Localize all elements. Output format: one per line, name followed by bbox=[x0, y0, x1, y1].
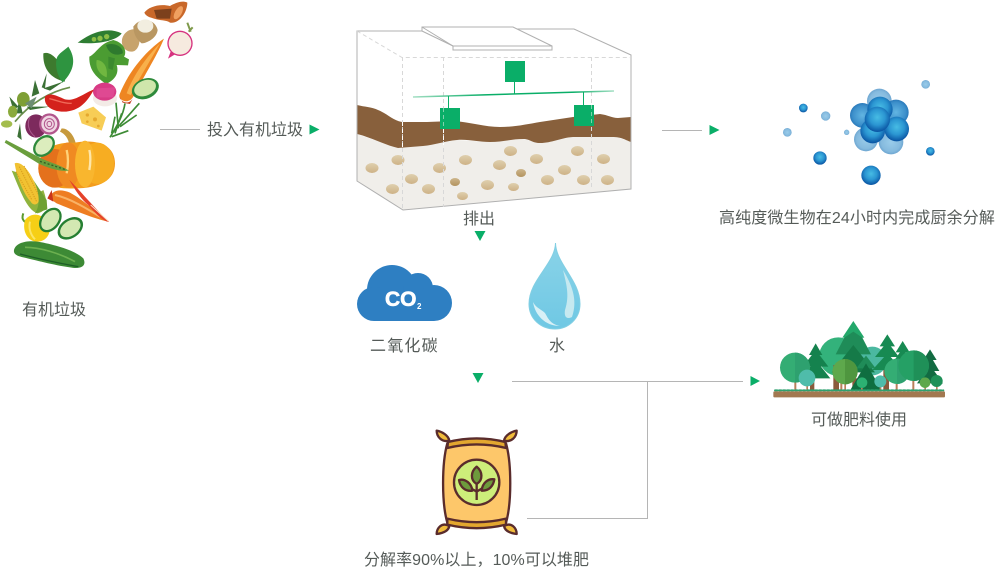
pea pod bbox=[78, 30, 122, 43]
cucumber slices low bbox=[34, 203, 87, 244]
connector lines bbox=[512, 376, 760, 518]
bag body bbox=[443, 440, 510, 527]
red onion bbox=[25, 113, 60, 138]
ground bbox=[775, 387, 943, 393]
subscript 2: 2 bbox=[417, 302, 422, 311]
pumpkin bbox=[38, 128, 115, 188]
label: water: 水 bbox=[549, 337, 565, 355]
brown soil layer bbox=[357, 105, 631, 148]
plant badge bbox=[454, 460, 499, 505]
arrow: waste into tank bbox=[160, 124, 320, 134]
pine trees bbox=[801, 343, 830, 378]
back round trees bbox=[819, 337, 858, 376]
icon: CO2 cloud bbox=[357, 265, 452, 321]
mushrooms bbox=[122, 19, 158, 52]
tank walls bbox=[357, 29, 631, 210]
label: discharge: 排出 bbox=[463, 210, 495, 228]
soil base bbox=[357, 134, 631, 210]
stones bbox=[366, 146, 614, 200]
lower carrot bbox=[47, 190, 108, 222]
herb sprig bbox=[110, 103, 139, 137]
cucumber slice bbox=[129, 74, 162, 103]
label: carbon dioxide: 二氧化碳 bbox=[370, 337, 439, 355]
CO2 text: CO bbox=[385, 288, 416, 311]
illustration: fermentation tank bbox=[357, 27, 631, 210]
round trees bbox=[780, 353, 810, 391]
dark stones bbox=[450, 169, 526, 186]
tank lid bbox=[422, 27, 552, 50]
beans bbox=[144, 2, 187, 23]
cheese bbox=[78, 107, 106, 131]
arrow: to microbes bbox=[662, 125, 720, 135]
illustration: organic waste vegetables bbox=[1, 2, 193, 268]
pink radish bbox=[93, 83, 117, 106]
whole cucumber bbox=[14, 241, 84, 268]
illustration: forest bbox=[773, 321, 945, 397]
radish slice bbox=[167, 23, 193, 59]
label: fertilizer use: 可做肥料使用 bbox=[811, 411, 907, 429]
icon: fertilizer bag bbox=[437, 431, 517, 534]
bag corners bbox=[437, 431, 517, 534]
yellow pepper bbox=[23, 213, 50, 242]
label: organic waste: 有机垃圾 bbox=[22, 301, 86, 319]
carrot top bbox=[119, 39, 164, 104]
pipe bbox=[413, 91, 614, 97]
dark leaves bbox=[43, 47, 73, 83]
asparagus bbox=[5, 140, 69, 171]
arrow: discharge down bbox=[474, 231, 486, 241]
cucumber slice mid bbox=[29, 131, 59, 161]
lettuce bbox=[89, 40, 129, 84]
corn bbox=[12, 163, 47, 213]
illustration: microbes bbox=[783, 80, 935, 185]
icon: water drop bbox=[529, 243, 580, 329]
arrow: down to fertilizer bbox=[472, 373, 484, 383]
red chili tip bbox=[69, 180, 109, 222]
label: microbes description: 高纯度微生物在24小时内完成厨余分解 bbox=[719, 208, 995, 227]
tank outline bbox=[357, 29, 631, 210]
green sensors bbox=[440, 61, 594, 129]
olive branch bbox=[1, 73, 70, 140]
red chili bbox=[45, 89, 94, 112]
label: input organic waste: 投入有机垃圾 bbox=[207, 121, 303, 139]
